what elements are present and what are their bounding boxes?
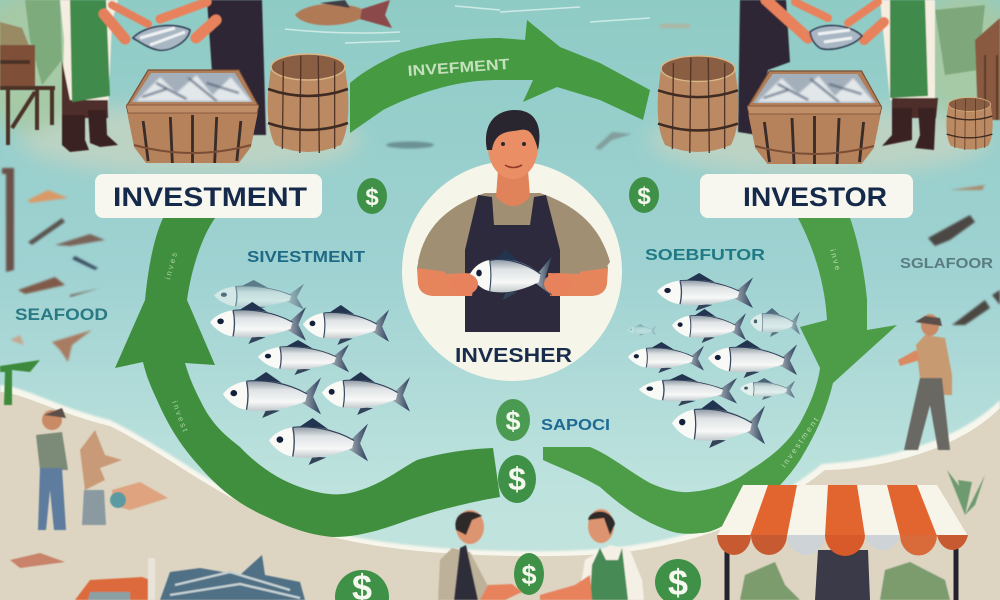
- vendor: [815, 550, 870, 600]
- dollar icons: $: [365, 184, 379, 211]
- beach plant right: [947, 470, 985, 515]
- arrow label: INVEFMENT: [407, 56, 510, 80]
- neck and head: [486, 110, 539, 206]
- left crate of fish: [126, 70, 259, 163]
- investment label box: INVESTMENT: [113, 182, 308, 212]
- faint labels: SEAFOOD: [15, 305, 108, 324]
- arms: [417, 245, 476, 296]
- dollar icons: $: [505, 406, 521, 436]
- left circular arrow: [115, 218, 500, 537]
- handshake right person: [540, 509, 644, 600]
- hands: [450, 273, 478, 295]
- small barrel: [946, 98, 993, 150]
- decorative soft tones: [0, 0, 1000, 175]
- walking person right: [898, 314, 952, 450]
- faint labels: SAPOCI: [541, 417, 610, 434]
- faint labels: SGLAFOOR: [900, 255, 993, 272]
- sand shore: [0, 385, 1000, 600]
- truck with fish pile: [75, 555, 305, 600]
- debris along left and right waters: [2, 168, 1000, 362]
- left barrel: [268, 54, 348, 153]
- dollar icons: $: [637, 183, 651, 210]
- arrow faint lettering: [779, 248, 842, 469]
- right fishmongers exchanging fish: [738, 0, 938, 150]
- right barrel: [658, 56, 738, 153]
- right green apron person: [848, 0, 938, 150]
- apron: [465, 195, 560, 332]
- investment label box: [95, 174, 322, 218]
- plants: [740, 562, 950, 600]
- right hut and foliage: [935, 5, 1000, 120]
- right crate of fish: [747, 71, 882, 164]
- dollar icons: [335, 177, 701, 600]
- top green arrow: [350, 20, 650, 133]
- central circle with fisher: [402, 110, 622, 381]
- circle label: INVESHER: [455, 345, 573, 367]
- fisher torso: [418, 193, 610, 332]
- small debris in water: [386, 24, 690, 150]
- handshake left person: [438, 510, 522, 600]
- market stall awning: [717, 485, 968, 600]
- arrow faint lettering: i n v e s t: [170, 400, 190, 433]
- arrow faint lettering: i n v e: [828, 248, 842, 272]
- dollar icons: $: [508, 461, 526, 497]
- left hut and foliage: [0, 0, 62, 145]
- adult: [36, 408, 68, 530]
- arrow faint lettering: i n v e s t m e n t: [779, 415, 821, 469]
- beach people left: [10, 408, 168, 568]
- valance: [717, 535, 968, 556]
- right tray with fish: [810, 26, 862, 49]
- faint labels: SIVESTMENT: [247, 249, 365, 266]
- right circular arrow: [543, 218, 897, 534]
- faint labels: SOEBFUTOR: [645, 247, 766, 264]
- faint labels: [15, 247, 993, 434]
- investor label box: INVESTOR: [743, 182, 887, 212]
- investor label box: [700, 174, 913, 218]
- arrow faint lettering: [163, 252, 190, 433]
- poles: [727, 545, 956, 600]
- water ripples: [285, 6, 650, 43]
- held fish: [470, 250, 552, 300]
- child and basket: [80, 430, 168, 525]
- right school of fish: [628, 273, 800, 448]
- dollar icons: $: [521, 560, 537, 590]
- left person green apron: [60, 0, 148, 152]
- right dark apron person: [738, 0, 828, 135]
- left fishmongers exchanging fish: [60, 0, 266, 152]
- second person dark apron: [160, 0, 266, 135]
- top swimming fish: [295, 0, 392, 28]
- arrow faint lettering: i n v e s: [163, 252, 179, 281]
- tray with fish: [133, 26, 190, 50]
- left school of fish: [210, 280, 410, 465]
- palm on shore: [0, 360, 40, 405]
